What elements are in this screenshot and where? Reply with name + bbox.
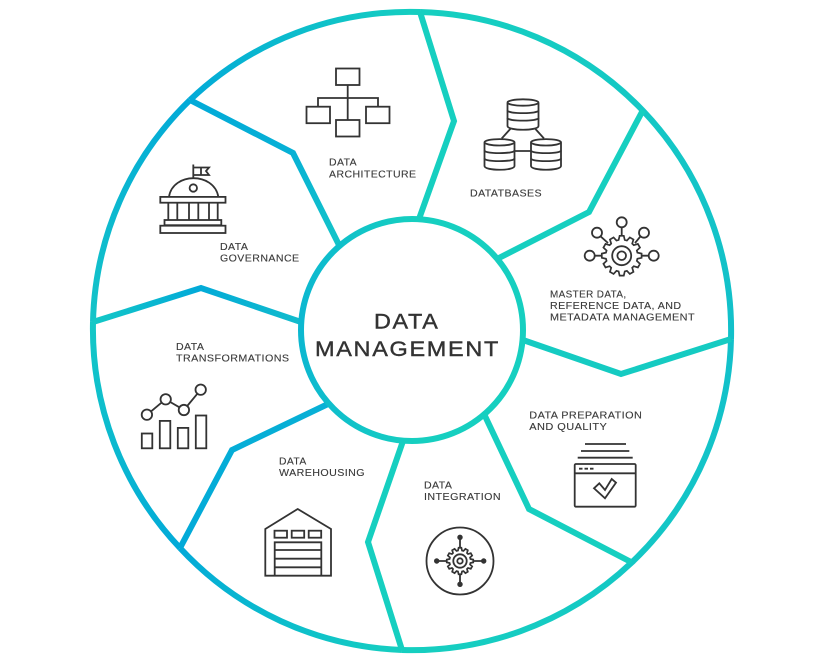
icon: gear in circle with filled nodes [426, 528, 494, 594]
segment dividers [93, 12, 731, 650]
label: data preparation and quality: DATA PREPARATION [529, 410, 642, 421]
label: data governance: DATA [220, 242, 248, 253]
panel: data warehousing [265, 456, 365, 576]
icon: warehouse [265, 509, 331, 576]
label: data warehousing: WAREHOUSING [279, 468, 365, 479]
panel: data transformations [142, 342, 290, 448]
panel: data governance [160, 164, 300, 265]
label: data warehousing [279, 456, 365, 479]
icon: government building with flag [160, 164, 226, 233]
icon: linked database cylinders [484, 99, 561, 170]
label: master data, reference data, and metadata management: MASTER DATA, [550, 289, 626, 300]
label: data architecture: DATA [329, 158, 357, 168]
panel: data preparation and quality [529, 410, 642, 507]
label: data integration: DATA [424, 480, 452, 491]
label: data preparation and quality: AND QUALITY [529, 422, 607, 433]
label: data transformations: TRANSFORMATIONS [176, 354, 290, 365]
label: data preparation and quality [529, 410, 642, 433]
label: data architecture [329, 158, 416, 180]
icon: org chart [306, 68, 390, 136]
label: master data, reference data, and metadata management: METADATA MANAGEMENT [550, 313, 695, 324]
panel: master data, reference data, and metadata management [550, 217, 695, 324]
label: data architecture: ARCHITECTURE [329, 169, 416, 180]
center circle: data management: DATA [374, 310, 440, 333]
center circle: data management [301, 219, 523, 441]
icon: browser window with check mark [575, 444, 636, 507]
icon: bar and line chart [142, 384, 206, 448]
label: databases: DATATBASES [470, 189, 542, 200]
label: master data, reference data, and metadata management: REFERENCE DATA, AND [550, 301, 682, 312]
outer ring [93, 12, 731, 650]
label: data transformations: DATA [176, 342, 204, 353]
panel: data integration [424, 480, 501, 594]
label: data transformations [176, 342, 290, 365]
panel: databases [470, 99, 561, 200]
label: master data, reference data, and metadata management [550, 289, 695, 324]
label: data governance: GOVERNANCE [220, 254, 300, 265]
panel: data architecture [306, 68, 416, 180]
label: data governance [220, 242, 300, 265]
label: data integration [424, 480, 501, 503]
label: data integration: INTEGRATION [424, 492, 501, 503]
label: data warehousing: DATA [279, 456, 307, 467]
center circle: data management: MANAGEMENT [315, 338, 500, 361]
icon: gear with nodes [585, 217, 659, 276]
